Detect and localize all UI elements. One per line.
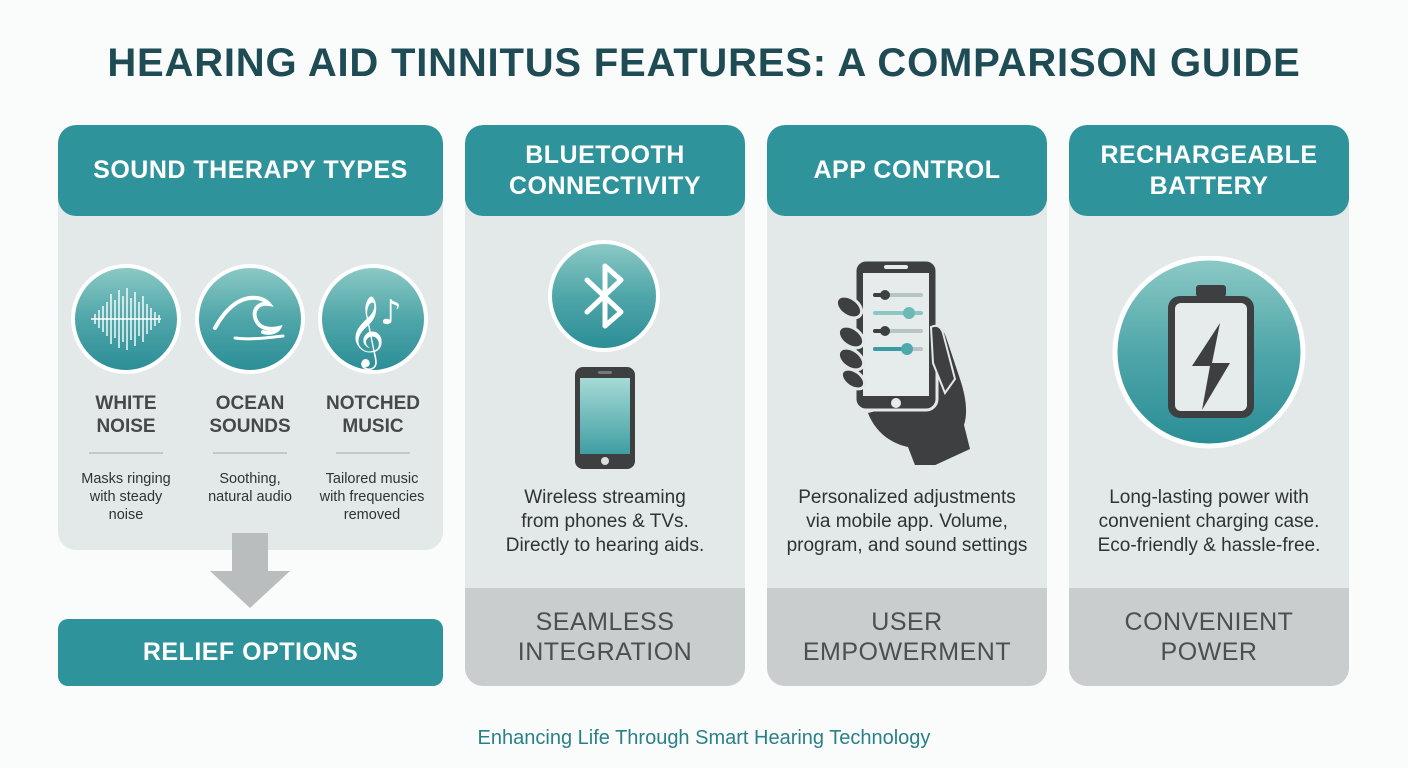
footer: user empowerment: USER [871, 608, 943, 636]
text: app desc: via mobile app. Volume, [806, 511, 1008, 532]
footer: convenient power: CONVENIENT [1125, 608, 1293, 636]
text: app desc: program, and sound settings [787, 535, 1027, 556]
text: app desc: Personalized adjustments [798, 487, 1016, 508]
footer: user empowerment [767, 588, 1047, 686]
panel: sound therapy types [58, 125, 443, 550]
text: ocean desc: Soothing, [219, 471, 281, 487]
heading: sound therapy types: SOUND THERAPY TYPES [93, 156, 408, 184]
text: white noise desc: Masks ringing with steady noise [81, 471, 171, 523]
text: app desc [787, 487, 1027, 556]
text: battery desc [1098, 487, 1320, 556]
text: bluetooth desc: from phones & TVs. [521, 511, 689, 532]
icon: hand holding phone [838, 262, 970, 465]
text: bluetooth desc: Directly to hearing aids. [506, 535, 704, 556]
panel: rechargeable battery [1069, 125, 1349, 686]
heading: sound therapy types [58, 125, 443, 216]
text: ocean desc: natural audio [208, 489, 292, 505]
text: battery desc: convenient charging case. [1099, 511, 1319, 532]
footer: convenient power: POWER [1161, 638, 1257, 666]
label: white noise [95, 393, 157, 437]
label: ocean sounds: OCEAN [216, 393, 284, 414]
footer: seamless integration [465, 588, 745, 686]
footer: seamless integration: SEAMLESS [536, 608, 674, 636]
heading: bluetooth: CONNECTIVITY [509, 172, 701, 200]
label: notched music: NOTCHED [326, 393, 420, 414]
heading: battery: BATTERY [1150, 172, 1268, 200]
heading: bluetooth: BLUETOOTH [525, 140, 685, 168]
icon: phone [575, 367, 635, 469]
relief options bar [58, 619, 443, 686]
icon: bluetooth [548, 240, 660, 352]
footer: seamless integration: INTEGRATION [518, 638, 692, 666]
text: battery desc: Eco-friendly & hassle-free. [1098, 535, 1320, 556]
footer: convenient power [1069, 588, 1349, 686]
text: notched desc: Tailored music with frequencies removed [320, 471, 424, 523]
icon: music notes [318, 264, 428, 374]
text: ocean desc [208, 471, 292, 505]
icon: music notes: ♪ [380, 293, 402, 333]
label: white noise: NOISE [96, 416, 156, 437]
footer: user empowerment: EMPOWERMENT [803, 638, 1011, 666]
icon: white noise [71, 264, 181, 374]
label: ocean sounds [209, 393, 291, 437]
heading: app control: APP CONTROL [814, 156, 1000, 184]
heading: app control [767, 125, 1047, 216]
label: notched music: MUSIC [342, 416, 404, 437]
label: notched music [326, 393, 420, 437]
text: bluetooth desc: Wireless streaming [524, 487, 686, 508]
title: HEARING AID TINNITUS FEATURES: A COMPARISON GUIDE [107, 41, 1301, 85]
panel: bluetooth [465, 125, 745, 686]
text: bluetooth desc [506, 487, 704, 556]
text: battery desc: Long-lasting power with [1109, 487, 1309, 508]
icon: ocean wave [195, 264, 305, 374]
heading: bluetooth [465, 125, 745, 216]
heading: battery: RECHARGEABLE [1100, 140, 1318, 168]
tagline: Enhancing Life Through Smart Hearing Technology [478, 727, 930, 749]
relief options bar: RELIEF OPTIONS [143, 638, 358, 666]
heading: battery [1069, 125, 1349, 216]
panel: app control [767, 125, 1047, 686]
label: ocean sounds: SOUNDS [209, 416, 291, 437]
icon: battery [1112, 256, 1306, 448]
icon: music notes: 𝄞 [348, 294, 385, 370]
label: white noise: WHITE [95, 393, 157, 414]
arrow: down [210, 533, 290, 608]
